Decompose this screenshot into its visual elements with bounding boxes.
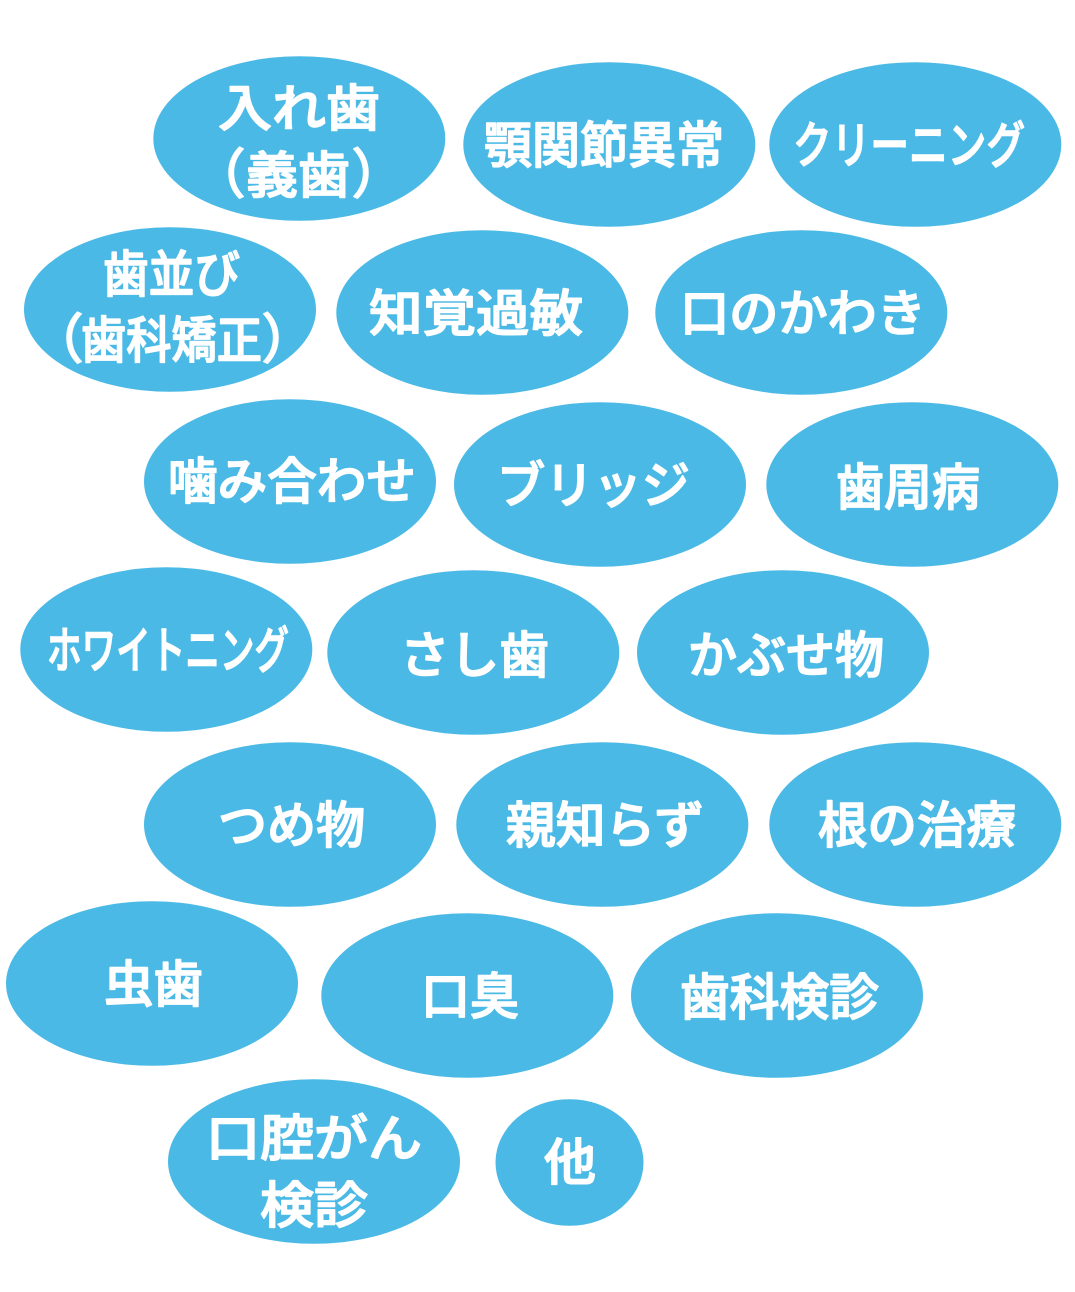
bubble: orthodontics bbox=[24, 227, 316, 392]
bubble: post crown bbox=[327, 570, 619, 735]
bubble: bridge bbox=[454, 402, 746, 567]
bubble: cleaning bbox=[769, 62, 1061, 227]
bubble: crown: かぶせ物 bbox=[688, 628, 884, 684]
bubble: root canal: 根の治療 bbox=[818, 798, 1016, 854]
bubble: other bbox=[496, 1099, 644, 1226]
bubble: periodontal disease: 歯周病 bbox=[836, 460, 980, 516]
bubble: oral cancer screening: 検診 bbox=[260, 1178, 368, 1234]
bubble: dry mouth: 口のかわき bbox=[680, 286, 926, 342]
bubble: bad breath: 口臭 bbox=[421, 969, 519, 1025]
bubble: other: 他 bbox=[544, 1135, 596, 1191]
bubble: dentures: （ bbox=[192, 145, 246, 205]
bubble: dentures: 入れ歯 bbox=[218, 81, 380, 137]
bubble: filling: つめ物 bbox=[218, 798, 365, 854]
bubble: filling bbox=[144, 742, 436, 907]
bubble: wisdom teeth: 親知らず bbox=[506, 798, 704, 854]
bubble: dentures: 義歯 bbox=[246, 148, 350, 204]
bubble: dental checkup bbox=[631, 913, 923, 1078]
bubble: TMJ disorder bbox=[463, 62, 755, 227]
bubble: sensitivity bbox=[336, 230, 628, 395]
bubble: dental checkup: 歯科検診 bbox=[680, 970, 879, 1026]
bubble: whitening: ホワイトニング bbox=[47, 623, 289, 679]
bubble: wisdom teeth bbox=[456, 742, 748, 907]
bubble: periodontal disease bbox=[766, 402, 1058, 567]
bubble: root canal bbox=[769, 742, 1061, 907]
bubble: orthodontics: ） bbox=[261, 310, 315, 370]
bubble: orthodontics: 歯並び bbox=[103, 247, 240, 303]
bubble: dentures: ） bbox=[351, 145, 405, 205]
bubble: cavities: 虫歯 bbox=[104, 957, 203, 1013]
bubble: dry mouth bbox=[655, 230, 947, 395]
bubble: orthodontics: 歯科矯正 bbox=[81, 313, 262, 369]
bubble: bad breath bbox=[321, 913, 613, 1078]
bubble: orthodontics: （ bbox=[30, 310, 84, 370]
bubble: cavities bbox=[6, 901, 298, 1066]
bubble: oral cancer screening: 口腔がん bbox=[206, 1111, 422, 1167]
bubble: oral cancer screening bbox=[168, 1079, 460, 1244]
bubble: bite: 噛み合わせ bbox=[168, 454, 416, 510]
bubble: bridge: ブリッジ bbox=[497, 458, 690, 514]
bubble: bite bbox=[144, 399, 436, 564]
bubble: dentures bbox=[153, 56, 445, 221]
bubble: TMJ disorder: 顎関節異常 bbox=[484, 118, 724, 174]
bubble: sensitivity: 知覚過敏 bbox=[369, 286, 583, 342]
bubble: crown bbox=[637, 570, 929, 735]
bubble: post crown: さし歯 bbox=[400, 628, 549, 684]
bubble: whitening bbox=[20, 567, 312, 732]
